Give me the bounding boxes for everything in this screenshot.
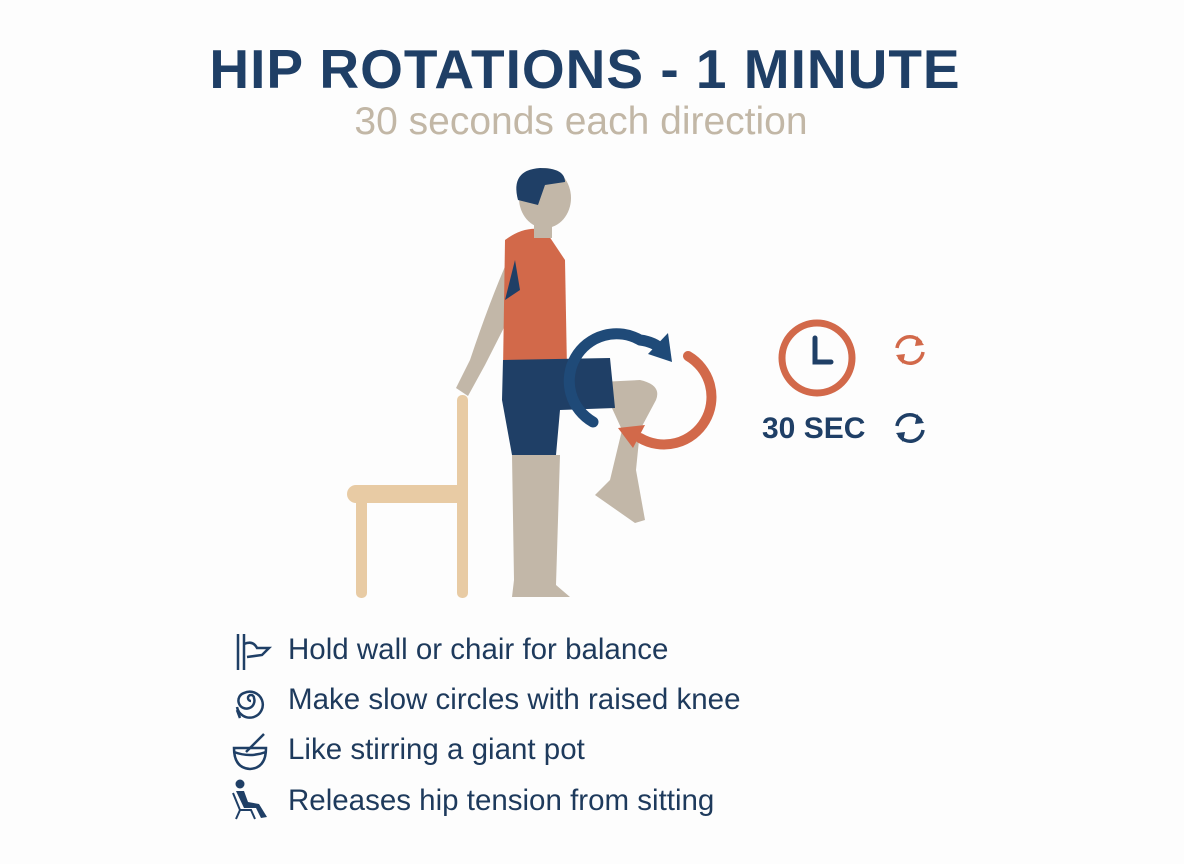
tip 4: Releases hip tension from sitting <box>288 784 714 817</box>
title: HIP ROTATIONS - 1 MINUTE <box>209 38 961 100</box>
timer block <box>762 320 925 445</box>
arrow: orange circle <box>640 356 711 444</box>
label: 30 SEC: 30 SEC <box>762 412 865 445</box>
subtitle: 30 seconds each direction <box>354 100 808 143</box>
icon: clock <box>778 320 856 396</box>
icon: spiral <box>236 690 264 719</box>
arrow: blue circle <box>569 334 662 422</box>
icon: wall hand <box>236 634 272 670</box>
icon: reclining person <box>232 780 267 820</box>
tip 3: Like stirring a giant pot <box>288 733 585 766</box>
list of tips <box>232 633 740 820</box>
figure <box>456 168 657 597</box>
icon: refresh orange <box>895 335 925 365</box>
icon: pot <box>232 733 268 770</box>
tip 1: Hold wall or chair for balance <box>288 633 668 666</box>
chair <box>347 395 468 598</box>
tip 2: Make slow circles with raised knee <box>288 683 740 716</box>
icon: refresh navy <box>895 413 925 443</box>
